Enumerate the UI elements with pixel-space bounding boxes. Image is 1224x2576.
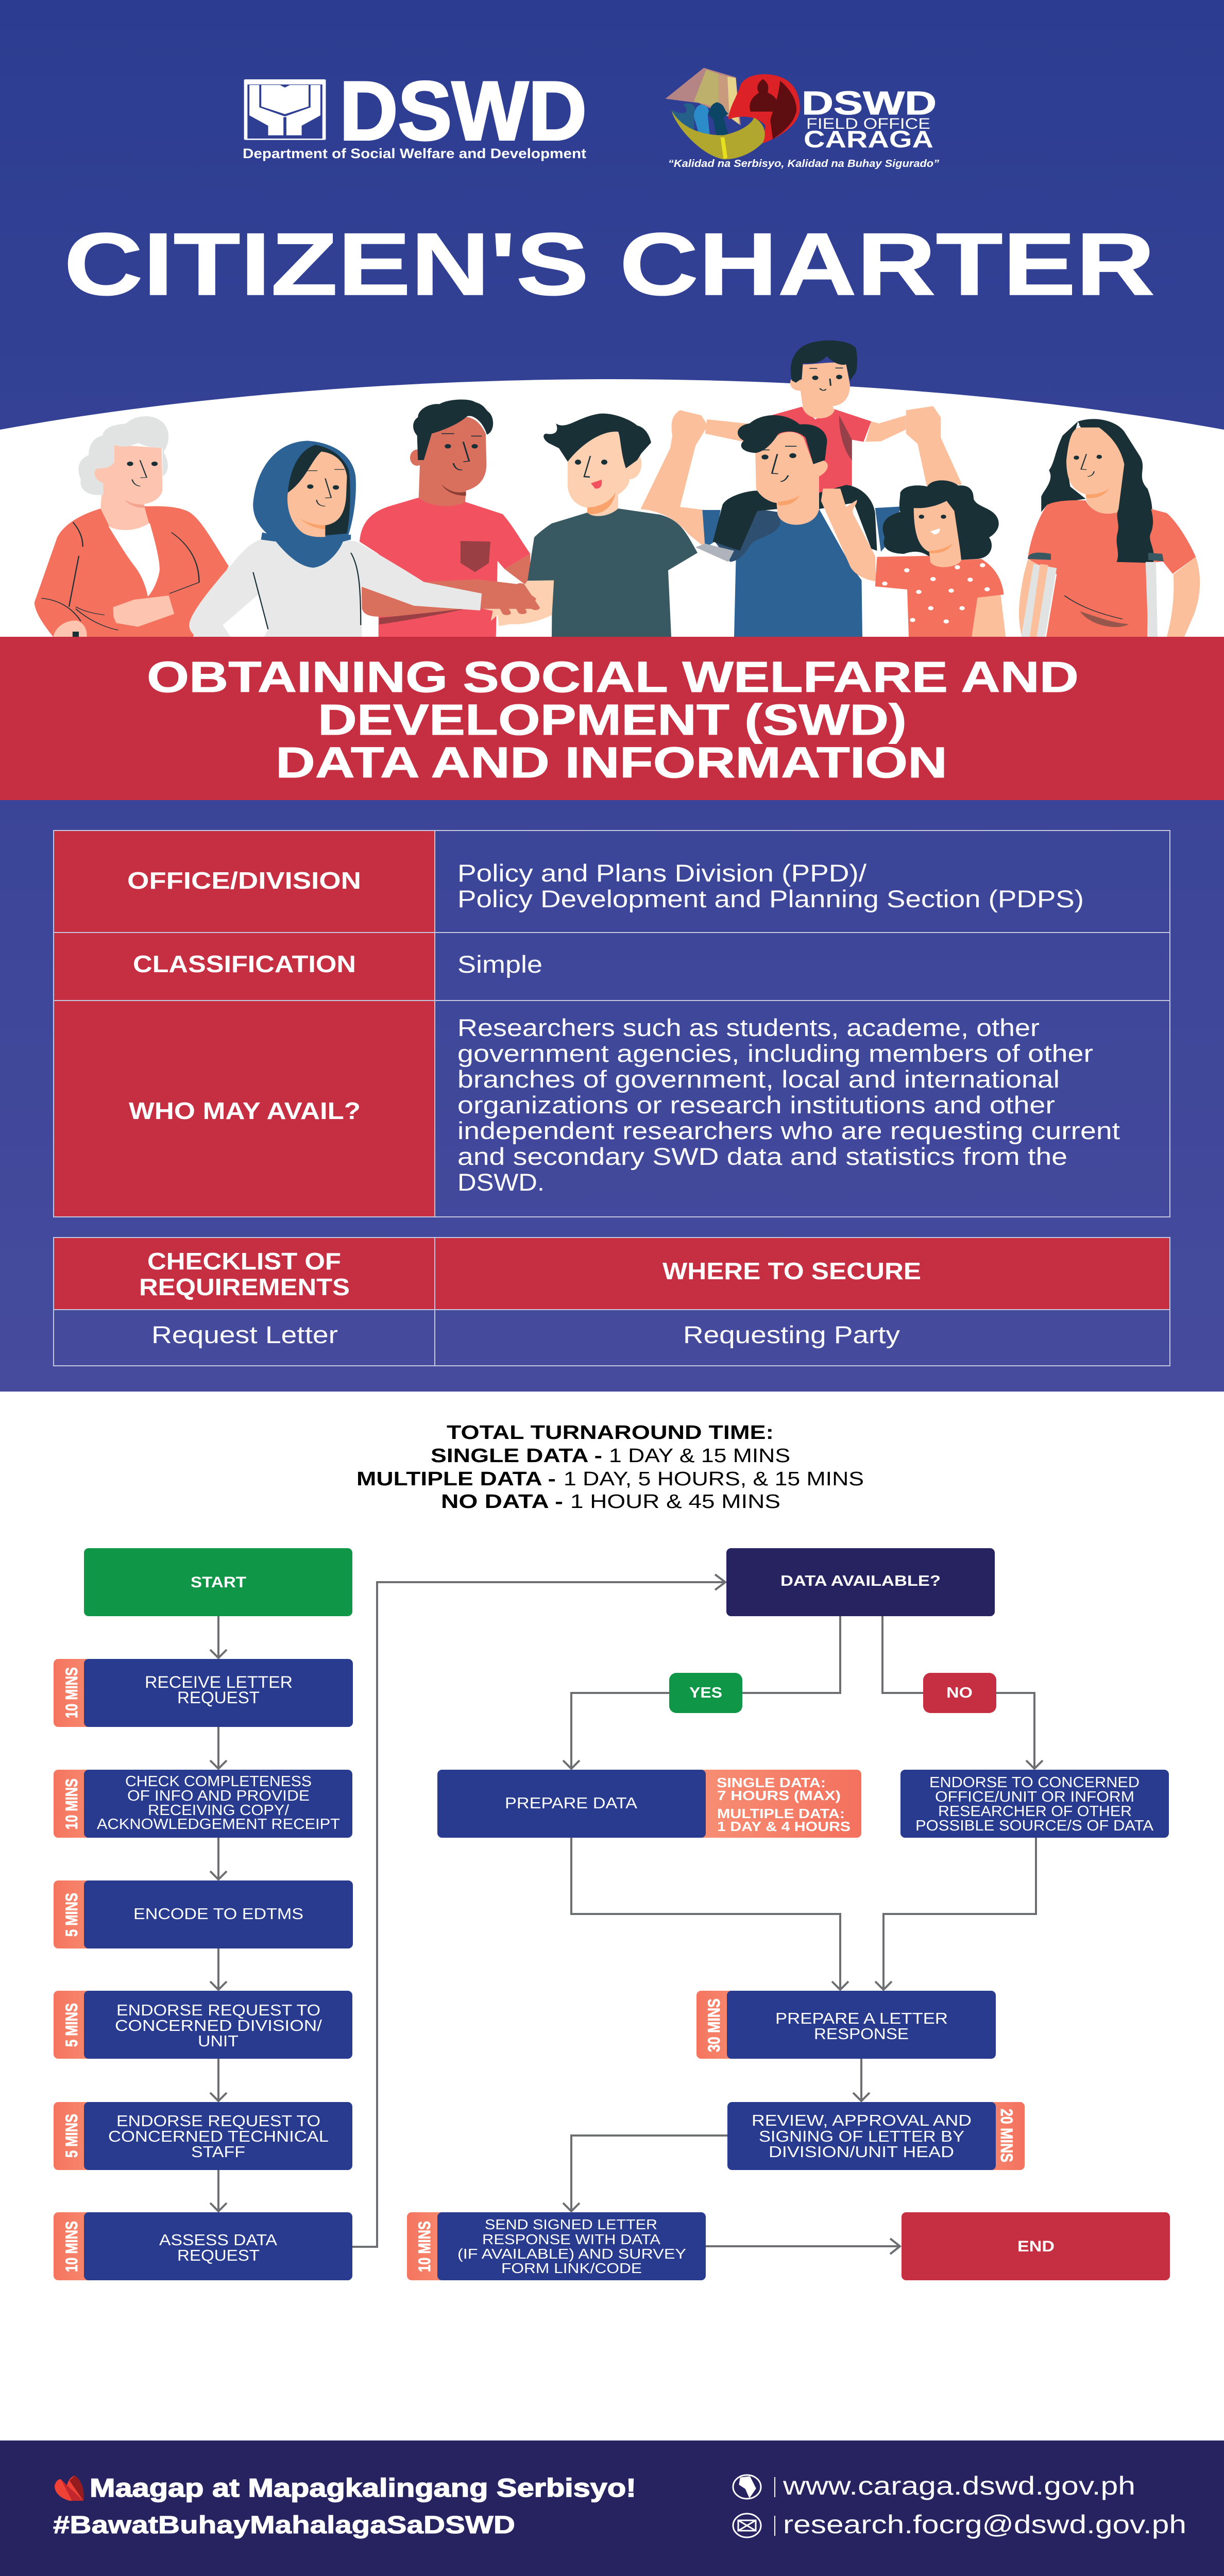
flow step: send signed letter response: SEND SIGNED LETTER <box>485 2216 657 2232</box>
icon: red heart <box>55 2476 83 2501</box>
person: grandmother <box>35 416 229 637</box>
total turnaround time: NO DATA - <box>441 1491 563 1513</box>
value: who may avail: DSWD. <box>457 1168 545 1196</box>
header: checklist: REQUIREMENTS <box>139 1274 350 1300</box>
flow step: encode to EDTMS: 5 MINS <box>62 1893 81 1937</box>
flow step: prepare a letter response <box>696 1991 996 2059</box>
flow step: review, approval and signing: SIGNING OF LETTER BY <box>759 2127 964 2145</box>
department name: Department of Social Welfare and Development <box>243 146 586 161</box>
value: who may avail: independent researchers who are requesting current <box>457 1117 1120 1144</box>
flow step: start <box>84 1548 352 1616</box>
hand of man <box>483 580 554 626</box>
flow step: send signed letter response: FORM LINK/CODE <box>501 2260 642 2276</box>
value: who may avail: Researchers such as students, academe, other <box>457 1014 1040 1041</box>
divider: email <box>774 2516 775 2536</box>
total turnaround time: 1 HOUR & 45 MINS <box>570 1491 780 1513</box>
divider: website <box>774 2477 775 2497</box>
person: father carrying child <box>641 341 962 637</box>
total turnaround time: TOTAL TURNAROUND TIME: <box>447 1422 774 1444</box>
text: CARAGA: CARAGA <box>804 126 933 152</box>
flow step: prepare data with time callout: 7 HOURS (MAX) <box>717 1788 841 1803</box>
text: FIELD OFFICE: FIELD OFFICE <box>806 115 930 132</box>
flow step: assess data request: 10 MINS <box>62 2221 81 2272</box>
value: who may avail: and secondary SWD data and statistics from the <box>457 1143 1067 1170</box>
red heading band <box>0 637 1224 800</box>
wordmark DSWD: DSWD <box>339 64 587 158</box>
flow step: review, approval and signing <box>727 2102 1025 2170</box>
icon: Caraga emblem <box>666 68 800 159</box>
value: who may avail: branches of government, local and international <box>457 1065 1060 1093</box>
flow step: endorse to concerned office: OFFICE/UNIT OR INFORM <box>935 1789 1134 1805</box>
flow step: review, approval and signing: DIVISION/UNIT HEAD <box>769 2143 954 2161</box>
footer panel <box>0 2441 1224 2576</box>
flow step: send signed letter response: RESPONSE WITH DATA <box>482 2231 660 2247</box>
label: classification: CLASSIFICATION <box>133 951 356 977</box>
flow step: review, approval and signing: 20 MINS <box>997 2109 1016 2162</box>
value: requesting party: Requesting Party <box>683 1321 900 1348</box>
flow step: send signed letter response: 10 MINS <box>415 2221 434 2272</box>
service heading: OBTAINING SOCIAL WELFARE AND <box>147 653 1079 701</box>
flow step: receive letter request: RECEIVE LETTER <box>145 1673 293 1691</box>
flow step: prepare a letter response: 30 MINS <box>705 1998 723 2052</box>
slogan: Maagap at Mapagkalingang Serbisyo! <box>90 2473 636 2502</box>
flow step: endorse to concerned office: ENDORSE TO CONCERNED <box>929 1774 1140 1791</box>
flow step: endorse to technical staff: STAFF <box>191 2143 245 2161</box>
flow step: endorse to division: UNIT <box>198 2032 239 2050</box>
icon: globe <box>733 2475 761 2499</box>
person: curly-haired girl <box>821 480 1006 637</box>
flow step: check completeness: 10 MINS <box>62 1778 81 1829</box>
flow step: prepare data with time callout: 1 DAY & 4 HOURS <box>717 1819 851 1834</box>
total turnaround time: SINGLE DATA - <box>431 1445 602 1467</box>
title: CITIZEN'S CHARTER <box>64 215 1155 314</box>
flow step: end: END <box>1017 2238 1055 2255</box>
flow step: receive letter request: 10 MINS <box>62 1667 81 1718</box>
flow step: endorse to concerned office: POSSIBLE SOURCE/S OF DATA <box>915 1818 1154 1834</box>
flow step: encode to EDTMS: ENCODE TO EDTMS <box>133 1905 303 1923</box>
decision: data available <box>726 1548 995 1616</box>
logo: DSWD <box>243 64 587 161</box>
logo: DSWD Field Office Caraga <box>666 68 939 170</box>
flow step: endorse to technical staff <box>54 2102 352 2170</box>
flow step: prepare data with time callout: MULTIPLE DATA: <box>717 1806 845 1821</box>
person: man in dark teal shirt <box>483 414 698 637</box>
branch label: no: NO <box>946 1685 973 1701</box>
service heading: DATA AND INFORMATION <box>276 738 947 787</box>
flow step: endorse to division: 5 MINS <box>62 2003 81 2047</box>
illustration: diverse group of people <box>35 341 1200 637</box>
table: office, classification, who may avail <box>54 831 1170 1217</box>
flow step: prepare data with time callout <box>437 1770 861 1838</box>
flow step: check completeness: OF INFO AND PROVIDE <box>127 1788 310 1804</box>
value: office/division <box>457 859 1084 912</box>
flow step: endorse to division <box>54 1991 352 2059</box>
total turnaround time: 1 DAY & 15 MINS <box>609 1445 790 1467</box>
flow step: assess data request: REQUEST <box>177 2246 260 2264</box>
value: who may avail: organizations or research institutions and other <box>457 1091 1055 1118</box>
branch label: yes <box>669 1673 742 1713</box>
value: classification: Simple <box>457 951 542 978</box>
value: office/division: Policy and Plans Division (PPD)/ <box>457 859 867 887</box>
flow step: endorse to concerned office <box>900 1770 1169 1838</box>
flow step: encode to EDTMS <box>54 1880 353 1948</box>
value: request letter: Request Letter <box>151 1321 338 1348</box>
value: who may avail <box>457 1014 1120 1196</box>
service heading: DEVELOPMENT (SWD) <box>318 696 907 744</box>
flow step: check completeness: CHECK COMPLETENESS <box>125 1773 312 1790</box>
blue details panel <box>0 800 1224 1392</box>
flow step: review, approval and signing: REVIEW, APPROVAL AND <box>752 2111 972 2129</box>
header blue panel <box>0 0 1224 639</box>
total turnaround time <box>356 1422 864 1513</box>
flow step: endorse to technical staff: ENDORSE REQUEST TO <box>116 2112 320 2130</box>
flow step: assess data request <box>54 2212 352 2280</box>
flow step: receive letter request: REQUEST <box>177 1688 260 1707</box>
flow step: send signed letter response: (IF AVAILABLE) AND SURVEY <box>457 2246 686 2262</box>
header: where to secure: WHERE TO SECURE <box>662 1258 921 1284</box>
flow step: prepare a letter response: RESPONSE <box>814 2025 909 2043</box>
flow step: end <box>902 2212 1170 2280</box>
flow step: check completeness <box>54 1770 352 1838</box>
hashtag: #BawatBuhayMahalagaSaDSWD <box>53 2512 515 2539</box>
table: checklist of requirements <box>54 1238 1170 1366</box>
flow step: endorse to division: CONCERNED DIVISION/ <box>115 2016 322 2035</box>
header: checklist <box>139 1248 350 1300</box>
header: checklist: CHECKLIST OF <box>147 1248 341 1275</box>
branch label: no <box>923 1673 996 1713</box>
flow step: endorse to concerned office: RESEARCHER OF OTHER <box>938 1803 1132 1820</box>
flow step: endorse to technical staff: 5 MINS <box>62 2114 81 2158</box>
person: woman with crutches <box>1019 419 1200 637</box>
icon: envelope <box>733 2514 761 2537</box>
service heading <box>147 653 1079 787</box>
website address: www.caraga.dswd.gov.ph <box>783 2471 1135 2500</box>
total turnaround time: MULTIPLE DATA - <box>356 1468 556 1490</box>
flow step: send signed letter response <box>407 2212 706 2280</box>
flow step: prepare a letter response: PREPARE A LETTER <box>775 2009 948 2027</box>
tagline: “Kalidad na Serbisyo, Kalidad na Buhay Sigurado” <box>668 158 939 170</box>
label: who may avail: WHO MAY AVAIL? <box>129 1097 361 1124</box>
value: office/division: Policy Development and Planning Section (PDPS) <box>457 885 1084 912</box>
flow step: prepare data with time callout: SINGLE DATA: <box>717 1775 826 1790</box>
person: red shirt man <box>360 399 530 637</box>
flow step: check completeness: RECEIVING COPY/ <box>148 1802 290 1819</box>
total turnaround time: 1 DAY, 5 HOURS, & 15 MINS <box>564 1468 864 1490</box>
branch label: yes: YES <box>689 1685 722 1701</box>
icon: DSWD shield <box>244 79 326 140</box>
text: DSWD: DSWD <box>802 84 937 122</box>
flow step: start: START <box>191 1574 246 1591</box>
label: office/division: OFFICE/DIVISION <box>127 867 361 894</box>
flow step: receive letter request <box>54 1659 353 1727</box>
decision: data available: DATA AVAILABLE? <box>780 1573 941 1589</box>
value: who may avail: government agencies, including members of other <box>457 1040 1093 1067</box>
flow step: endorse to division: ENDORSE REQUEST TO <box>116 2001 320 2019</box>
flow step: assess data request: ASSESS DATA <box>159 2231 277 2249</box>
email address: research.focrg@dswd.gov.ph <box>783 2510 1186 2539</box>
white curved stage behind people <box>0 379 1224 639</box>
flow step: prepare data with time callout: PREPARE DATA <box>505 1794 637 1812</box>
flow step: check completeness: ACKNOWLEDGEMENT RECEIPT <box>97 1816 340 1833</box>
flow step: endorse to technical staff: CONCERNED TECHNICAL <box>108 2127 329 2145</box>
person: woman in hijab with red-shirt man's arm <box>189 440 536 637</box>
flowchart connectors and arrows <box>210 1574 1043 2254</box>
